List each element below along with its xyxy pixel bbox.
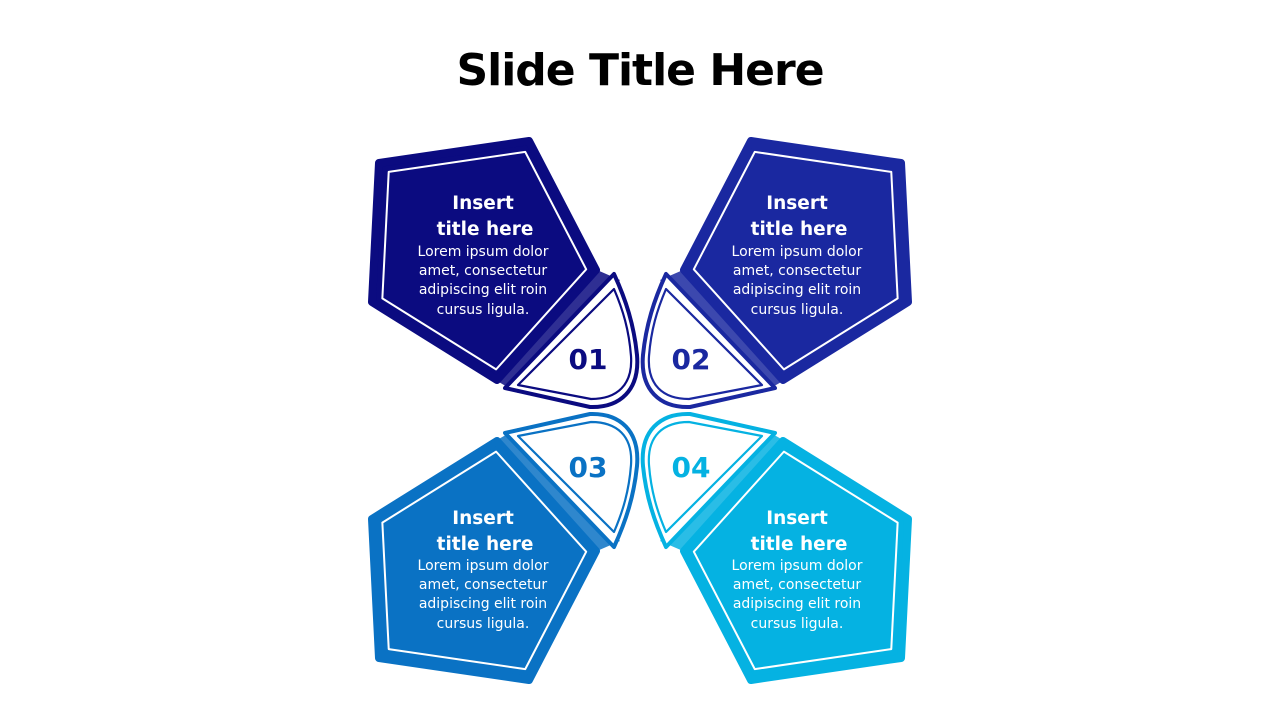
- text: 03: amet, consectetur: [419, 577, 547, 593]
- text: 04: Lorem ipsum dolor: [732, 558, 863, 574]
- text: 02: [732, 193, 863, 318]
- text: 01: Lorem ipsum dolor: [418, 244, 549, 260]
- number 03: 03: [569, 451, 607, 484]
- text: 03: title here: [437, 534, 533, 555]
- text: 04: adipiscing elit roin: [733, 596, 861, 612]
- number 01: 01: [569, 343, 607, 376]
- panel: 03: [372, 414, 637, 680]
- text: 01: Insert: [452, 193, 514, 214]
- text: 03: [418, 508, 549, 632]
- text: 04: amet, consectetur: [733, 577, 861, 593]
- text: 02: cursus ligula.: [751, 302, 843, 318]
- text: 01: adipiscing elit roin: [419, 282, 547, 298]
- text: 04: [732, 508, 863, 632]
- text: 02: Lorem ipsum dolor: [732, 244, 863, 260]
- title: Slide Title Here: [456, 45, 824, 96]
- text: 01: title here: [437, 219, 533, 240]
- panel: 01: [372, 141, 637, 407]
- text: 04: title here: [751, 534, 847, 555]
- text: 01: [418, 193, 549, 318]
- text: 02: title here: [751, 219, 847, 240]
- text: 03: cursus ligula.: [437, 616, 529, 632]
- text: 03: Lorem ipsum dolor: [418, 558, 549, 574]
- panel: 04: [643, 414, 908, 680]
- text: 03: Insert: [452, 508, 514, 529]
- text: 01: cursus ligula.: [437, 302, 529, 318]
- text: 02: adipiscing elit roin: [733, 282, 861, 298]
- text: 02: Insert: [766, 193, 828, 214]
- number 04: 04: [672, 451, 710, 484]
- text: 02: amet, consectetur: [733, 263, 861, 279]
- panel: 02: [643, 141, 908, 407]
- number 02: 02: [672, 343, 710, 376]
- text: 01: amet, consectetur: [419, 263, 547, 279]
- text: 04: Insert: [766, 508, 828, 529]
- text: 03: adipiscing elit roin: [419, 596, 547, 612]
- text: 04: cursus ligula.: [751, 616, 843, 632]
